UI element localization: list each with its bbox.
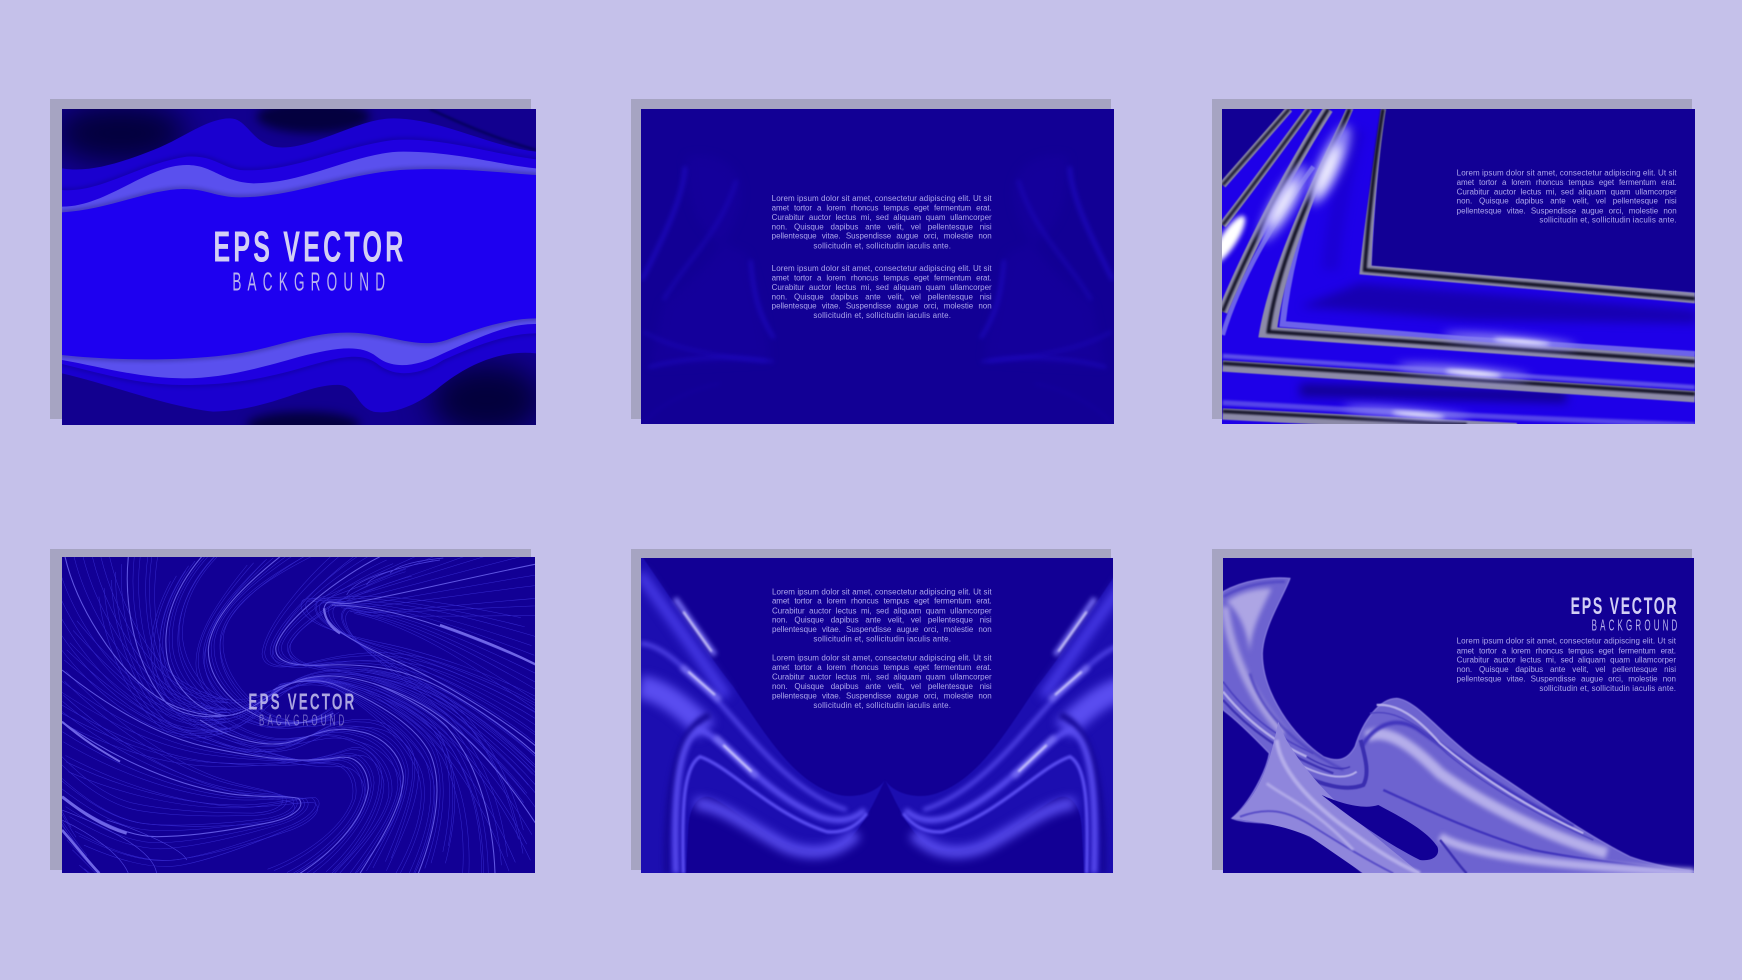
artwork: silk folds <box>641 558 1113 873</box>
text block 2: sollicitudin et, sollicitudin iaculis ante. <box>813 701 951 710</box>
artwork: swirl lines <box>62 557 535 873</box>
title: EPS VECTOR <box>1571 593 1677 620</box>
title <box>213 223 404 297</box>
text block 2: amet tortor a lorem rhoncus tempus eget fermentum erat. <box>772 273 992 282</box>
panel: metallic angled stripes with text <box>1212 99 1695 424</box>
text block <box>1457 637 1677 693</box>
bright key curves <box>62 557 537 873</box>
text block 2: non. Quisque dapibus ante velit, vel pellentesque nisi <box>772 682 992 691</box>
text block 2: pellentesque vitae. Suspendisse augue orci, molestie non <box>772 302 992 311</box>
text block 2: Lorem ipsum dolor sit amet, consectetur adipiscing elit. Ut sit <box>772 264 992 273</box>
artwork: lavender ribbon <box>1223 558 1694 873</box>
text block 2: amet tortor a lorem rhoncus tempus eget fermentum erat. <box>772 663 992 672</box>
text block 1: Lorem ipsum dolor sit amet, consectetur adipiscing elit. Ut sit <box>772 587 992 596</box>
text block: Lorem ipsum dolor sit amet, consectetur adipiscing elit. Ut sit <box>1457 168 1677 177</box>
text block: pellentesque vitae. Suspendisse augue orci, molestie non <box>1457 206 1677 215</box>
text block 1: sollicitudin et, sollicitudin iaculis ante. <box>813 241 951 250</box>
metallic band 1 <box>1359 109 1695 303</box>
artwork: layered waves <box>62 109 536 425</box>
text block: sollicitudin et, sollicitudin iaculis ante. <box>1539 216 1677 225</box>
text block 2: non. Quisque dapibus ante velit, vel pellentesque nisi <box>772 292 992 301</box>
text block: amet tortor a lorem rhoncus tempus eget fermentum erat. <box>1457 646 1676 655</box>
text block 1: pellentesque vitae. Suspendisse augue orci, molestie non <box>772 625 992 634</box>
title: EPS VECTOR <box>248 690 354 715</box>
text block: Curabitur auctor lectus mi, sed aliquam quam ullamcorper <box>1457 656 1676 665</box>
text block: sollicitudin et, sollicitudin iaculis ante. <box>1539 684 1676 693</box>
ribbon body <box>1223 578 1694 873</box>
text block 1 <box>772 194 992 250</box>
text block 1 <box>772 587 992 644</box>
text block 1: amet tortor a lorem rhoncus tempus eget fermentum erat. <box>772 203 992 212</box>
panel shadow <box>1212 549 1692 870</box>
text block 2: Curabitur auctor lectus mi, sed aliquam quam ullamcorper <box>772 673 992 682</box>
panel: wavy paper-cut cover with title <box>50 99 536 425</box>
text block 1: sollicitudin et, sollicitudin iaculis ante. <box>813 635 951 644</box>
text block 1: Lorem ipsum dolor sit amet, consectetur adipiscing elit. Ut sit <box>772 194 992 203</box>
text block 1: Curabitur auctor lectus mi, sed aliquam quam ullamcorper <box>772 606 992 615</box>
panel shadow <box>631 549 1111 870</box>
title: BACKGROUND <box>259 712 344 729</box>
panel: dark smoke with two text blocks <box>631 99 1114 424</box>
thin line family <box>34 510 565 920</box>
gap in ribbon <box>1322 795 1438 860</box>
artwork: metallic bands <box>1222 109 1695 424</box>
text block 2: pellentesque vitae. Suspendisse augue orci, molestie non <box>772 691 992 700</box>
text block <box>1457 168 1677 225</box>
text block 1: non. Quisque dapibus ante velit, vel pellentesque nisi <box>772 222 992 231</box>
panel shadow <box>50 99 531 419</box>
panel shadow <box>631 99 1111 419</box>
text block 2: sollicitudin et, sollicitudin iaculis ante. <box>813 311 951 320</box>
text block: Curabitur auctor lectus mi, sed aliquam quam ullamcorper <box>1457 187 1677 196</box>
panel: silk curtain with two text blocks <box>631 549 1113 873</box>
text block: amet tortor a lorem rhoncus tempus eget fermentum erat. <box>1457 178 1677 187</box>
title: EPS VECTOR <box>213 223 404 271</box>
panel shadow <box>50 549 531 870</box>
ribbon horn <box>1232 722 1420 873</box>
panel: swirling line art with title <box>50 549 535 873</box>
metallic band 4 <box>1223 109 1309 225</box>
panel shadow <box>1212 99 1692 419</box>
white highlights <box>1206 121 1577 424</box>
metallic band 3 <box>1223 109 1695 397</box>
text block 1: amet tortor a lorem rhoncus tempus eget fermentum erat. <box>772 597 992 606</box>
text block: Lorem ipsum dolor sit amet, consectetur adipiscing elit. Ut sit <box>1457 637 1677 646</box>
metallic band 6 <box>1223 403 1695 429</box>
text block 1: non. Quisque dapibus ante velit, vel pellentesque nisi <box>772 616 992 625</box>
text block 1: Curabitur auctor lectus mi, sed aliquam quam ullamcorper <box>772 213 992 222</box>
text block 1: pellentesque vitae. Suspendisse augue orci, molestie non <box>772 232 992 241</box>
metallic band 5 <box>1223 109 1289 185</box>
text block: non. Quisque dapibus ante velit, vel pellentesque nisi <box>1457 197 1677 206</box>
lavender paper layer <box>62 152 536 378</box>
panel: flowing ribbon with title and text <box>1212 549 1694 873</box>
text block 2: Lorem ipsum dolor sit amet, consectetur adipiscing elit. Ut sit <box>772 654 992 663</box>
text block 2 <box>772 264 992 320</box>
title: BACKGROUND <box>232 268 385 297</box>
metallic band 2 <box>1258 109 1695 367</box>
text block: non. Quisque dapibus ante velit, vel pellentesque nisi <box>1457 665 1676 674</box>
title <box>1571 593 1677 634</box>
text block 2: Curabitur auctor lectus mi, sed aliquam quam ullamcorper <box>772 283 992 292</box>
text block 2 <box>772 654 992 710</box>
title: BACKGROUND <box>1592 617 1677 634</box>
text block: pellentesque vitae. Suspendisse augue orci, molestie non <box>1457 675 1676 684</box>
artwork: faint wisps <box>641 109 1114 424</box>
title <box>248 690 354 729</box>
